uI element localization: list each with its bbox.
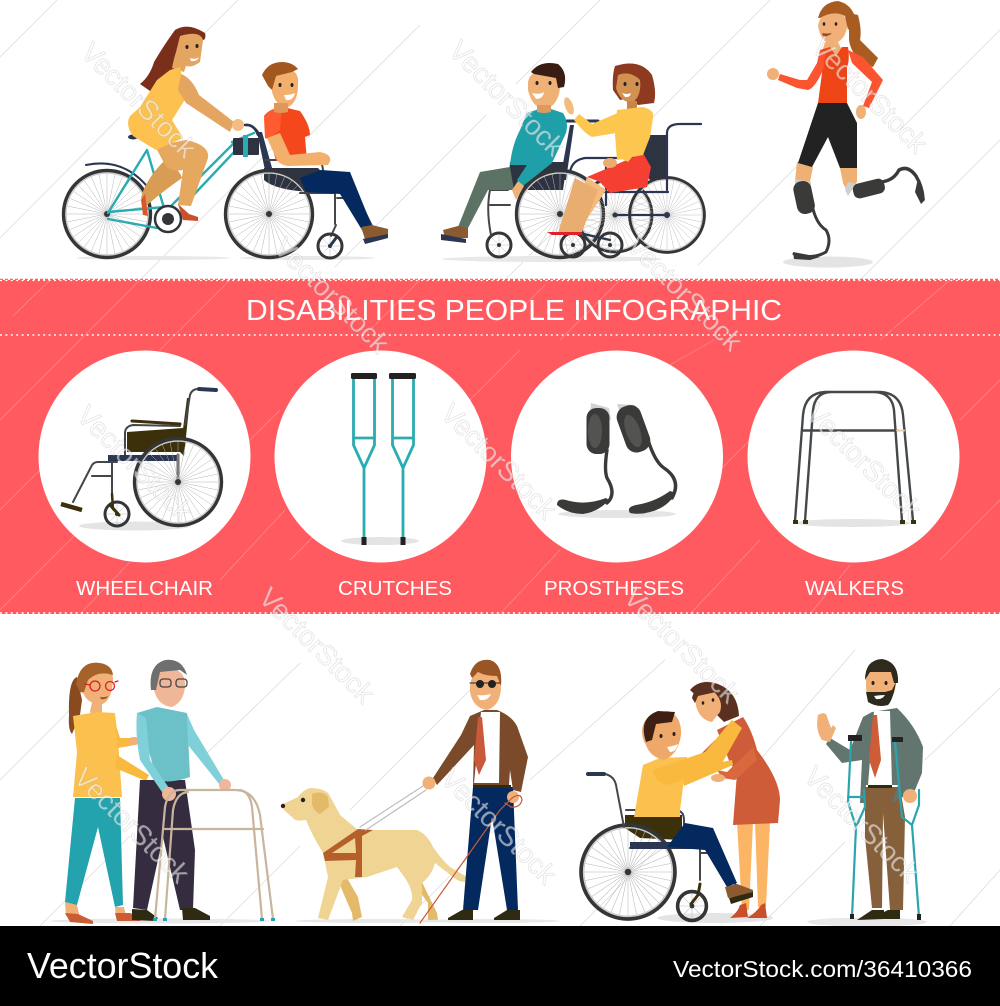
icon: walker [793,392,916,527]
far legs [338,878,362,921]
footer url: VectorStock.com/36410366 [673,956,972,982]
watermark text: VectorStock [618,581,746,710]
panel: walkers [748,350,960,600]
red banner panel [0,280,1000,614]
panel: wheelchair [38,350,250,600]
walker frame [155,790,273,919]
label: prostheses: PROSTHESES [544,578,684,600]
bicycle [64,125,259,258]
label: wheelchair: WHEELCHAIR [76,578,213,600]
watermark lines on banner [0,280,1000,614]
icon: prostheses [557,402,676,518]
man in yellow sweater [634,711,753,904]
woman in yellow blouse [547,63,655,235]
title: DISABILITIES PEOPLE INFOGRAPHIC [246,295,782,327]
panel: prostheses [511,350,723,600]
icon: wheelchair [61,389,222,530]
man's wheelchair back wheel [487,121,604,258]
watermark text: VectorStock [71,399,199,528]
crutches held [848,742,919,917]
watermark text: VectorStock [798,760,926,889]
watermark text: VectorStock [268,231,396,360]
man's wheelchair [581,774,740,920]
panel: crutches [274,350,486,600]
label: crutches: CRUTCHES [338,578,452,600]
illustration: guide dog [281,786,485,923]
watermark text: VectorStock [621,229,749,358]
illustration: woman helping older man with walker [50,660,275,924]
wheelchair [226,125,373,258]
illustration: runner with prosthetic legs [767,1,925,268]
watermark text: VectorStock [435,762,563,891]
man in teal sweater [441,63,567,243]
watermark text: VectorStock [806,31,934,160]
watermark text: VectorStock [443,34,571,163]
woman's wheelchair [561,124,704,257]
white cane [420,795,522,923]
watermark text [68,31,934,891]
older man [132,660,231,921]
man in wheelchair [262,62,388,244]
label: walkers: WALKERS [805,578,904,600]
running prosthetic blades [792,168,925,260]
illustration: woman on bicycle pushing man in wheelchair [64,27,388,260]
watermark text: VectorStock [253,581,381,710]
footer logo: VectorStock [27,945,219,986]
dog body [283,788,485,920]
watermark text: VectorStock [68,761,196,890]
footer bar [0,926,1000,1006]
dotted divider lines [0,280,1000,613]
illustration: blind man with cane [420,660,560,923]
illustration: woman hugging man in wheelchair [581,682,780,923]
woman in red dress [690,682,780,918]
dog lead [360,786,426,830]
watermark text: VectorStock [435,397,563,526]
watermark text: VectorStock [800,397,928,526]
icon: crutches [341,373,419,545]
illustration: man with crutches waving [807,659,927,926]
woman cyclist [128,27,244,221]
dog harness [323,829,373,877]
watermark text: VectorStock [75,36,203,165]
illustration: couple in wheelchairs [441,63,704,262]
woman with glasses [65,663,149,924]
